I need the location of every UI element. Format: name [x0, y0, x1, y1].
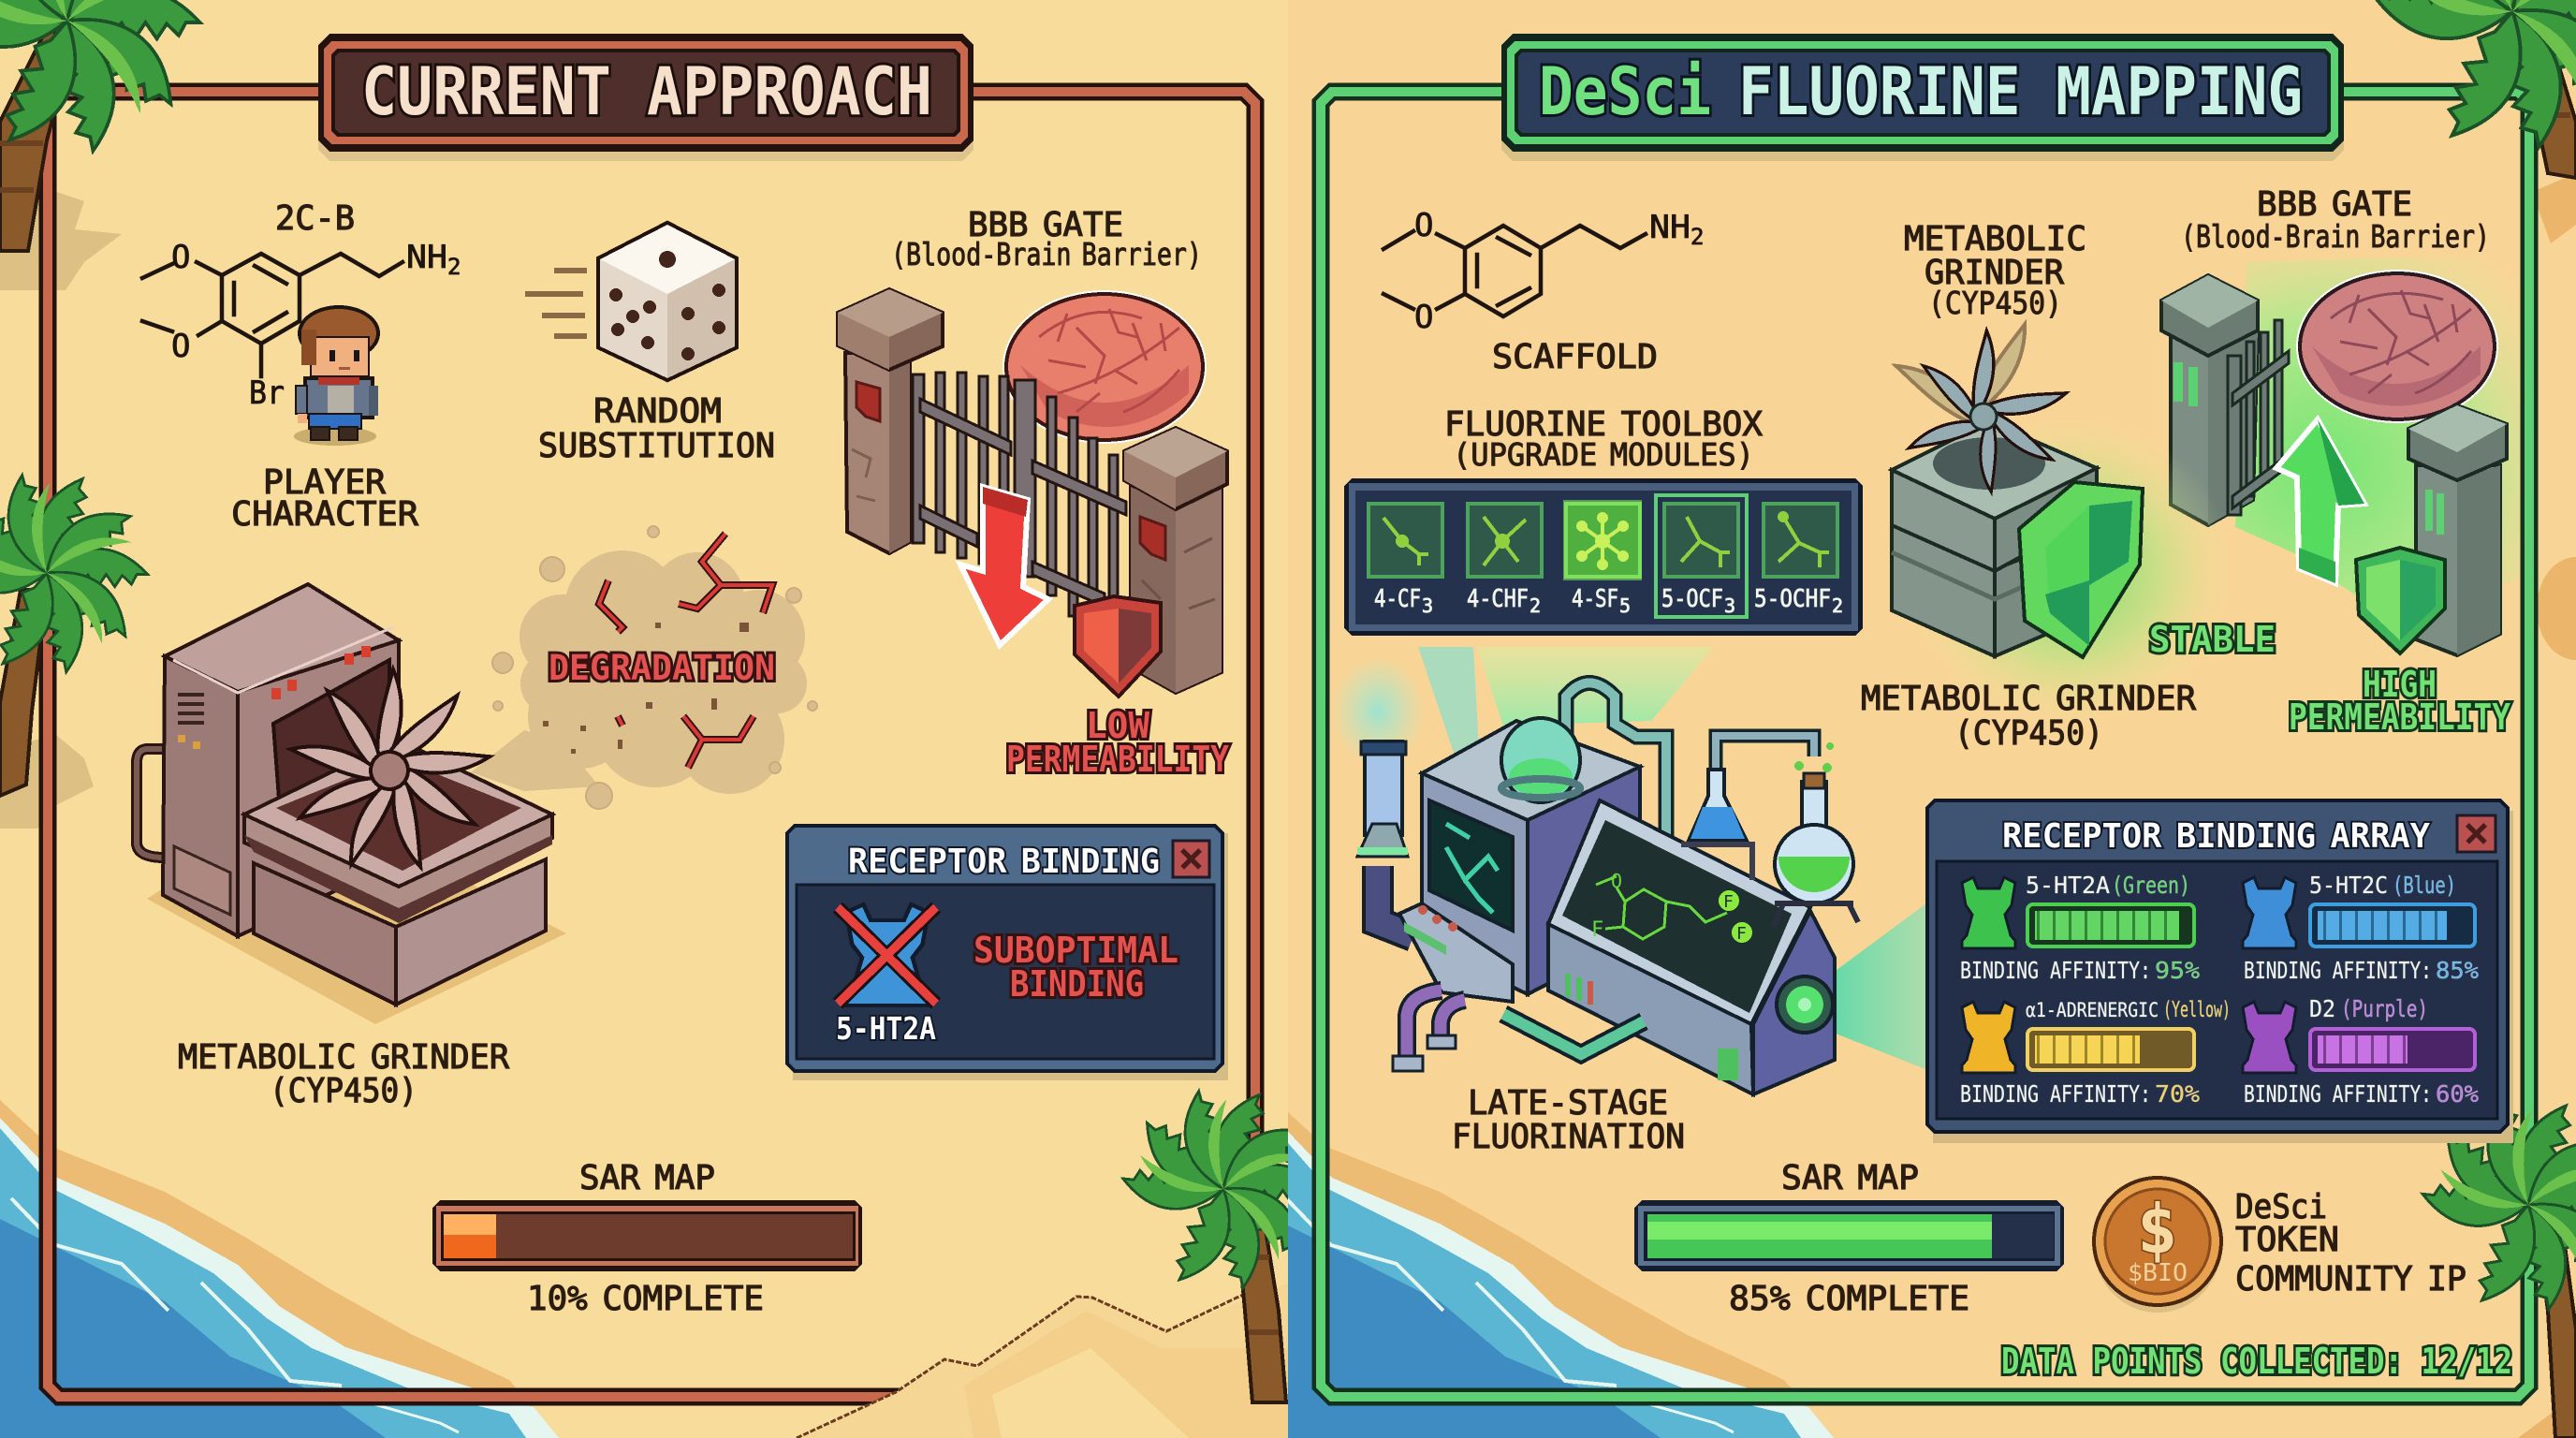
label: metabolic grinder top: (CYP450): [1928, 285, 2062, 321]
label: random substitution: RANDOM: [593, 392, 722, 431]
label: scaffold: SCAFFOLD: [1492, 338, 1658, 376]
receptor card: alpha1-adrenergic: BINDING AFFINITY:: [1960, 1080, 2151, 1108]
pillar left green: [2161, 275, 2258, 525]
lens glow: [1777, 976, 1833, 1033]
palm tree: top left: [0, 0, 204, 251]
label: random substitution: [538, 392, 775, 465]
receptor card: 5-HT2C: (Blue): [2393, 872, 2456, 899]
label: late-stage fluorination: LATE-STAGE: [1468, 1084, 1668, 1123]
illustration: stabilised metabolic grinder: [1889, 318, 2232, 726]
illustration: metabolic grinder rusty: [137, 584, 566, 1024]
label: high permeability: PERMEABILITY: [2289, 697, 2510, 738]
label: BBB gate right: (Blood-Brain Barrier): [2181, 218, 2490, 255]
palm tree: bottom right: [2418, 1096, 2576, 1438]
label: late-stage fluorination: FLUORINATION: [1452, 1118, 1685, 1156]
text: suboptimal binding: BINDING: [1010, 963, 1144, 1005]
receptor card: alpha1-adrenergic: α1-ADRENERGIC: [2026, 999, 2159, 1021]
panel: receptor binding: [787, 826, 1228, 1080]
label: stable: STABLE: [2149, 619, 2276, 660]
progress: SAR map left: 10% COMPLETE: [527, 1280, 764, 1318]
blue flask: [1681, 770, 1752, 880]
module: 5-OCHF2: 2: [1832, 594, 1843, 617]
keypad: [1399, 903, 1513, 1002]
module: 5-OCF3 selected: 5-OCF: [1661, 585, 1723, 613]
icon: $BIO coin: $BIO: [2128, 1259, 2188, 1287]
button: close: [1173, 841, 1209, 877]
panel: receptor binding array: [1927, 800, 2513, 1143]
label: metabolic grinder top: GRINDER: [1925, 254, 2064, 292]
progress: SAR map right: SAR MAP: [1781, 1159, 1919, 1197]
progress: SAR map left: [432, 1159, 862, 1318]
pillar right green: [2408, 405, 2507, 655]
panel frame: DeSci fluorine mapping: [1321, 92, 2529, 1397]
panel: fluorine toolbox modules: [1344, 478, 1863, 636]
label: player character: PLAYER: [263, 463, 386, 502]
module: 4-CF3: 3: [1422, 594, 1433, 617]
module: 4-CF3: 4-CF: [1374, 585, 1421, 613]
label: metabolic grinder right: METABOLIC GRINDER: [1861, 680, 2196, 718]
label: BBB gate left: BBB GATE: [968, 206, 1123, 244]
label: metabolic grinder left: (CYP450): [270, 1072, 417, 1110]
label: metabolic grinder right: [1861, 680, 2196, 753]
module: 4-SF5 highlighted: 4-SF: [1572, 585, 1618, 613]
green pipe: [1503, 1014, 1644, 1054]
molecule: scaffold: 2: [1690, 224, 1704, 250]
progress: SAR map right: [1634, 1159, 2064, 1318]
palm shadows on sand: [0, 192, 122, 829]
molecule: scaffold: O: [1414, 207, 1433, 244]
label: low permeability: PERMEABILITY: [1006, 739, 1229, 780]
label: fluorine toolbox: [1444, 405, 1763, 473]
label: metabolic grinder top: [1904, 220, 2086, 321]
illustration: closed BBB gate with brain: [838, 289, 1227, 697]
green flask: [1774, 742, 1858, 927]
receptor card: D2: 60%: [2436, 1080, 2479, 1108]
label: DeSci token community IP: COMMUNITY IP: [2235, 1260, 2466, 1299]
receptor card: 5-HT2A: 5-HT2A: [2026, 872, 2110, 899]
illustration: degradation cloud: [471, 526, 817, 809]
label: high permeability: HIGH: [2363, 664, 2437, 705]
illustration: open BBB gate with brain: [2161, 257, 2520, 655]
label: player character: [231, 463, 418, 534]
label: high permeability: [2289, 664, 2510, 738]
molecule: scaffold: NH: [1649, 209, 1690, 246]
module: 5-OCHF2: [1754, 504, 1843, 617]
brain healthy: [2296, 270, 2498, 423]
molecule: scaffold: O: [1414, 299, 1433, 336]
background: right beach sand: [1288, 0, 2576, 1438]
arrow: up high permeability: [2276, 419, 2364, 583]
module: 4-SF5 highlighted: [1563, 500, 1642, 617]
palm tree: top right: [2369, 0, 2576, 178]
shield: high: [2356, 548, 2445, 653]
module: 5-OCF3 selected: [1656, 495, 1747, 617]
main screen with fluorinated molecule: O: [1611, 870, 1622, 892]
label: BBB gate left: (Blood-Brain Barrier): [891, 236, 1202, 272]
label: BBB gate right: BBB GATE: [2257, 185, 2412, 224]
shield: stable: [2019, 482, 2143, 657]
palm tree: bottom centre: [1120, 1088, 1288, 1404]
column flask: [1357, 741, 1413, 936]
background: left beach sand: [0, 0, 1288, 1438]
receptor card: 5-HT2A: 95%: [2155, 957, 2200, 984]
gate bars: [913, 373, 1126, 618]
receptor card: 5-HT2C: BINDING AFFINITY:: [2244, 957, 2432, 984]
right ocean shoreline: [1275, 1100, 1834, 1438]
module: 4-CHF2: 4-CHF: [1467, 585, 1529, 613]
pillar left: [838, 289, 943, 553]
molecule: 2C-B: O: [171, 239, 190, 276]
label: low permeability: [1006, 705, 1229, 780]
top bulb: [1501, 718, 1580, 802]
panel frame: current approach: [48, 92, 1255, 1397]
progress: SAR map left: SAR MAP: [579, 1159, 715, 1197]
progress: SAR map right: 85% COMPLETE: [1729, 1280, 1969, 1318]
text: array title: RECEPTOR BINDING ARRAY: [2002, 817, 2430, 856]
text: suboptimal binding: [973, 930, 1178, 1005]
molecule: 2C-B: [142, 199, 461, 412]
molecule: 2C-B: O: [171, 328, 190, 365]
text: suboptimal binding: SUBOPTIMAL: [973, 930, 1178, 971]
label: low permeability: LOW: [1086, 705, 1149, 746]
title plaque: DeSci fluorine mapping: [1501, 34, 2344, 161]
receptor card: alpha1-adrenergic: (Yellow): [2163, 998, 2231, 1022]
label: DeSci token community IP: [2235, 1188, 2466, 1299]
receptor card: alpha1-adrenergic: [1960, 998, 2231, 1108]
receptor card: 5-HT2C: [2243, 872, 2479, 984]
icon: $BIO coin: $: [2137, 1190, 2177, 1269]
label: BBB gate right: [2181, 185, 2490, 255]
receptor card: 5-HT2C: 5-HT2C: [2309, 872, 2388, 899]
icon: blocked 5-HT2A receptor: [838, 904, 936, 1005]
side screen: [1429, 800, 1513, 931]
main screen with fluorinated molecule: F: [1736, 924, 1747, 944]
arrow: down low permeability: [960, 487, 1048, 645]
label: player character: CHARACTER: [231, 495, 418, 534]
icon: random dice: [525, 225, 735, 378]
main screen with fluorinated molecule: [1562, 820, 1792, 1013]
label: fluorine toolbox: FLUORINE TOOLBOX: [1444, 405, 1763, 444]
sand dune: [797, 1283, 1288, 1438]
label: degradation: DEGRADATION: [549, 648, 775, 688]
label: DeSci token community IP: TOKEN: [2235, 1221, 2339, 1259]
receptor card: D2: D2: [2309, 995, 2335, 1022]
module: 5-OCF3 selected: 3: [1724, 594, 1735, 617]
gate bars open: [2228, 320, 2289, 515]
title text: current approach: CURRENT APPROACH: [361, 53, 932, 130]
module: 4-SF5 highlighted: 5: [1619, 594, 1631, 617]
module: 5-OCHF2: 5-OCHF: [1754, 585, 1831, 613]
pillar right: [1124, 428, 1227, 693]
icon: player character: [294, 305, 380, 446]
palm tree: middle left: [0, 470, 151, 796]
brain: [1003, 290, 1207, 444]
title text: DeSci fluorine mapping: [1539, 53, 2303, 130]
label: fluorine toolbox: (UPGRADE MODULES): [1453, 436, 1754, 473]
button: close array: [2457, 815, 2496, 852]
receptor card: D2: (Purple): [2341, 995, 2428, 1022]
receptor card: D2: [2243, 995, 2479, 1108]
receptor card: 5-HT2A: [1960, 872, 2200, 984]
icon: $BIO coin: [2094, 1178, 2221, 1313]
molecule: 2C-B: 2: [447, 254, 461, 280]
receptor card: D2: BINDING AFFINITY:: [2244, 1080, 2432, 1108]
label: metabolic grinder right: (CYP450): [1954, 714, 2103, 753]
module: 4-CF3: [1368, 504, 1442, 617]
right edge dunes: [2518, 173, 2576, 1438]
label: BBB gate left: [891, 206, 1202, 272]
molecule: 2C-B: NH: [406, 239, 447, 276]
label: metabolic grinder top: METABOLIC: [1904, 220, 2086, 258]
module: 4-CHF2: 2: [1530, 594, 1541, 617]
purple pipes: [1407, 990, 1465, 1058]
left ocean shoreline: [0, 1100, 559, 1438]
label: 5-HT2A: 5-HT2A: [836, 1010, 936, 1047]
module: 4-CHF2: [1467, 504, 1542, 617]
label: metabolic grinder left: METABOLIC GRINDER: [178, 1038, 509, 1077]
main screen with fluorinated molecule: F: [1591, 918, 1603, 942]
title text: DeSci fluorine mapping: DeSci: [1539, 53, 1711, 130]
molecule: 2C-B: 2C-B: [275, 199, 355, 238]
label: DeSci token community IP: DeSci: [2235, 1188, 2327, 1226]
label: late-stage fluorination: [1452, 1084, 1685, 1156]
molecule: scaffold: [1383, 207, 1704, 376]
receptor card: 5-HT2C: 85%: [2436, 957, 2479, 984]
receptor card: alpha1-adrenergic: 70%: [2155, 1080, 2200, 1108]
main screen with fluorinated molecule: F: [1723, 892, 1734, 912]
shield: low: [1075, 596, 1161, 697]
receptor card: 5-HT2A: (Green): [2112, 872, 2190, 899]
title plaque: current approach: [318, 34, 973, 161]
label: metabolic grinder left: [178, 1038, 509, 1110]
receptor card: 5-HT2A: BINDING AFFINITY:: [1960, 957, 2151, 984]
illustration: late-stage fluorination lab machine: [1331, 647, 1930, 1094]
title text: DeSci fluorine mapping: FLUORINE MAPPING: [1738, 53, 2303, 130]
text: receptor binding title: RECEPTOR BINDING: [848, 843, 1160, 881]
label: random substitution: SUBSTITUTION: [538, 427, 775, 465]
molecule: 2C-B: Br: [249, 374, 285, 412]
